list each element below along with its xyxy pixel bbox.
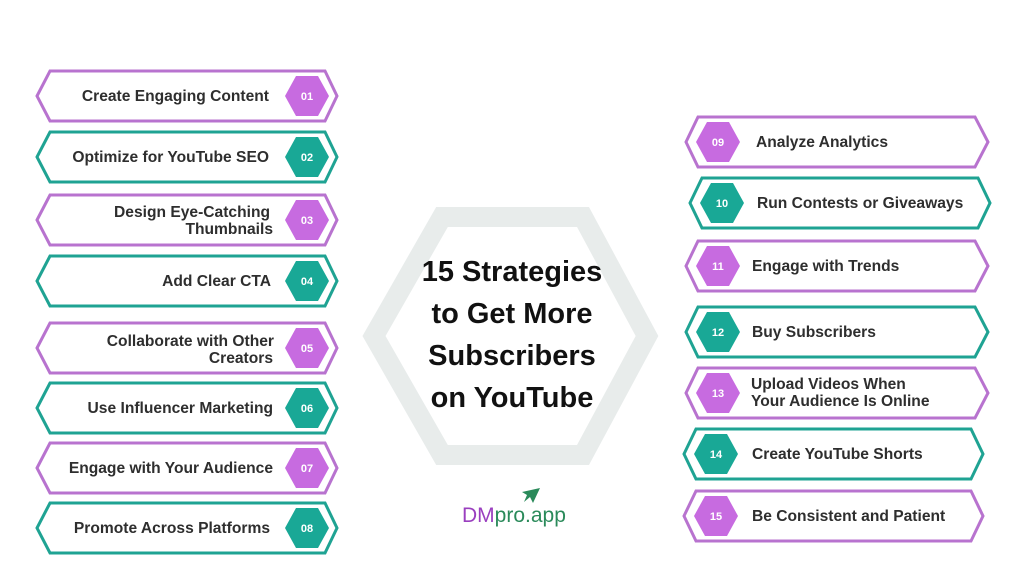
item 03: 03 — [301, 215, 313, 227]
item 08: 08 — [301, 523, 313, 535]
item 01: 01 — [301, 91, 313, 103]
logo: DMpro.app: DMpro.app — [462, 504, 566, 527]
item 12: Buy Subscribers — [752, 324, 876, 341]
item 13: Upload Videos When — [751, 376, 906, 393]
item 01: Create Engaging Content — [82, 88, 269, 105]
item 02 — [37, 132, 337, 182]
item 14 — [684, 429, 983, 479]
item 03: Thumbnails — [185, 221, 273, 238]
item 07: Engage with Your Audience — [69, 460, 273, 477]
item 13: Your Audience Is Online — [751, 393, 930, 410]
item 02: 02 — [301, 152, 313, 164]
item 10 — [690, 178, 990, 228]
title: 15 Strategies — [422, 256, 602, 288]
item 12: 12 — [712, 327, 724, 339]
item 04: 04 — [301, 276, 314, 288]
logo: DMpro.app — [462, 488, 566, 527]
item 05: 05 — [301, 343, 313, 355]
item 10: 10 — [716, 198, 728, 210]
item 09 — [686, 117, 988, 167]
title — [422, 256, 602, 414]
item 03: Design Eye-Catching — [114, 204, 270, 221]
item 10: Run Contests or Giveaways — [757, 195, 964, 212]
item 04 — [37, 256, 337, 306]
item 05 — [37, 323, 337, 373]
item 11: 11 — [712, 261, 724, 273]
item 09: 09 — [712, 137, 724, 149]
item 14: 14 — [710, 449, 723, 461]
center hexagon — [374, 217, 647, 455]
item 09: Analyze Analytics — [756, 134, 888, 151]
item 15 — [684, 491, 983, 541]
item 05: Creators — [209, 350, 273, 367]
item 06 — [37, 383, 337, 433]
item 15: 15 — [710, 511, 722, 523]
item 14: Create YouTube Shorts — [752, 446, 923, 463]
item 04: Add Clear CTA — [162, 273, 271, 290]
item 13 — [686, 368, 988, 418]
item 11: Engage with Trends — [752, 258, 900, 275]
title: Subscribers — [428, 340, 596, 372]
item 07 — [37, 443, 337, 493]
item 03 — [37, 195, 337, 245]
item 06: 06 — [301, 403, 313, 415]
item 15: Be Consistent and Patient — [752, 508, 945, 525]
item 06: Use Influencer Marketing — [88, 400, 273, 417]
item 08 — [37, 503, 337, 553]
item 02: Optimize for YouTube SEO — [72, 149, 269, 166]
title: to Get More — [431, 298, 593, 330]
item 05: Collaborate with Other — [107, 333, 274, 350]
item 01 — [37, 71, 337, 121]
item 11 — [686, 241, 988, 291]
item 08: Promote Across Platforms — [74, 520, 270, 537]
item 12 — [686, 307, 988, 357]
item 07: 07 — [301, 463, 313, 475]
item 13: 13 — [712, 388, 724, 400]
title: on YouTube — [431, 382, 593, 414]
